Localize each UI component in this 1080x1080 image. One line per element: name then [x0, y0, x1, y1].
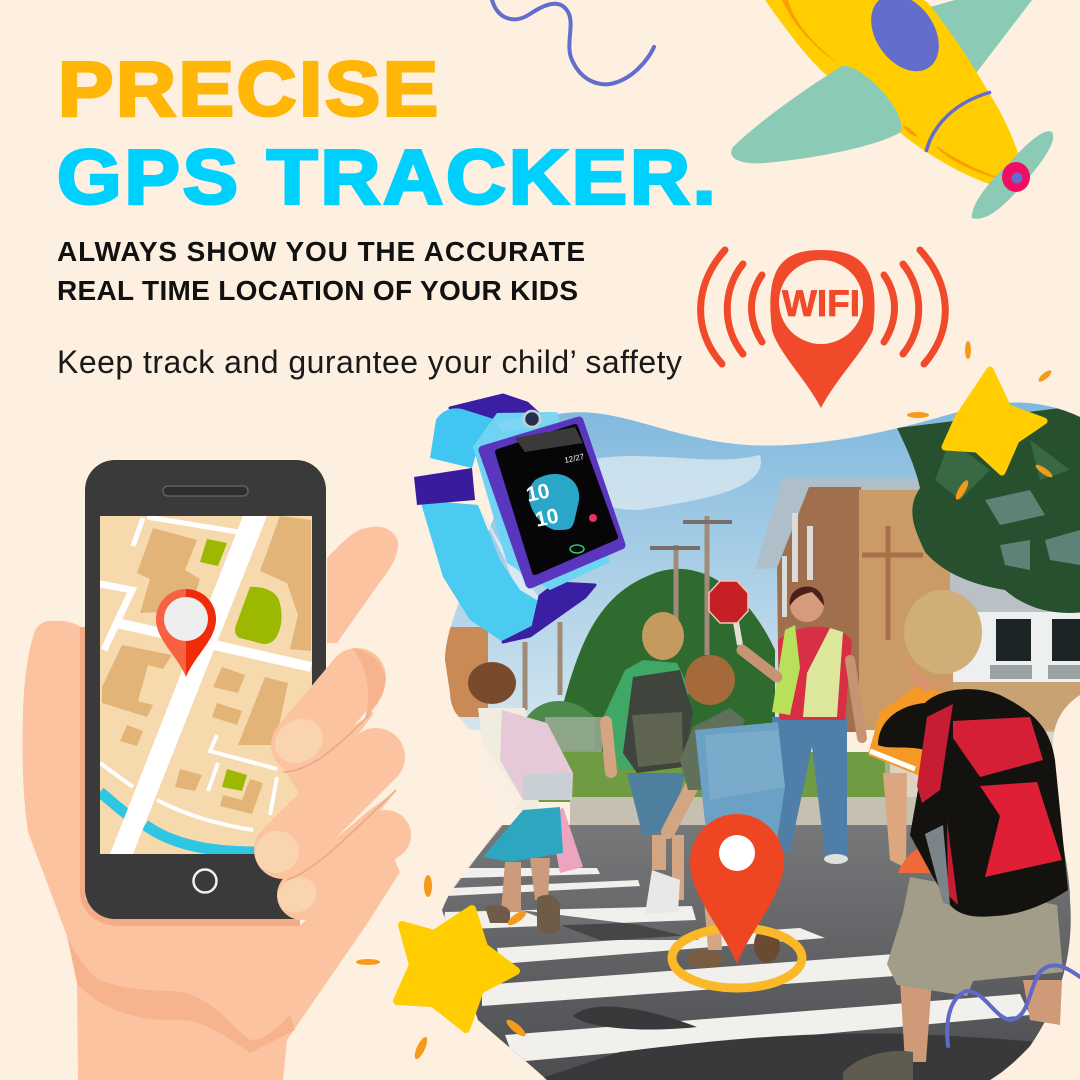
- child: boy with green shirt: [603, 612, 693, 914]
- smartwatch: 10: [533, 504, 561, 532]
- smartwatch: 10: [524, 479, 552, 507]
- icon: wifi location pin: [701, 250, 945, 408]
- title: gps tracker: GPS TRACKER.: [57, 133, 716, 220]
- smartwatch: [414, 395, 621, 642]
- map on phone screen: [100, 516, 312, 854]
- watch strap inner side: [478, 505, 545, 605]
- watch top strap: [450, 395, 540, 432]
- smartwatch: 12/27: [564, 452, 586, 465]
- icon: orange location pin with ring: [672, 814, 802, 988]
- crosswalk stripes: [443, 868, 1040, 1080]
- hand palm: [23, 526, 400, 1080]
- icon: wifi location pin: WIFI: [782, 283, 860, 324]
- curb and pavement: [570, 797, 916, 825]
- trees behind crossing: [560, 569, 775, 755]
- utility poles: [525, 516, 732, 710]
- airplane: [731, 0, 1053, 219]
- road shadows: [520, 910, 1040, 1080]
- fence: [545, 717, 602, 752]
- big tree: [897, 405, 1080, 613]
- child: large boy with red backpack: [843, 590, 1068, 1080]
- school building: [755, 477, 1080, 732]
- subheading: REAL TIME LOCATION OF YOUR KIDS: [57, 275, 578, 306]
- title: precise: PRECISE: [58, 45, 438, 132]
- body text: Keep track and gurantee your child’ saffety: [57, 344, 682, 380]
- child: girl with pink backpack: [468, 662, 583, 934]
- blue squiggle top: [492, 0, 654, 84]
- watch face: [529, 474, 579, 530]
- road: [430, 825, 1080, 1080]
- translucent edge of photo: [445, 700, 523, 900]
- crossing guard: [742, 586, 862, 864]
- icon: star bottom: [356, 875, 528, 1061]
- subheading: [57, 236, 585, 306]
- brick stub at left: [445, 627, 488, 717]
- grass: [530, 752, 890, 802]
- blue squiggle bottom right: [947, 965, 1080, 1046]
- watch case: [473, 412, 610, 590]
- watch lower strap: [420, 500, 545, 642]
- phone: [85, 460, 326, 919]
- child: boy with blue backpack: [668, 655, 785, 968]
- icon: star top right: [907, 341, 1054, 501]
- hand fingers: [248, 648, 397, 919]
- subheading: ALWAYS SHOW YOU THE ACCURATE: [57, 236, 585, 267]
- map pin: [156, 589, 186, 677]
- stop sign: [709, 581, 748, 645]
- watch keeper band: [414, 468, 475, 505]
- panel: school crossing photo: [430, 400, 1080, 1080]
